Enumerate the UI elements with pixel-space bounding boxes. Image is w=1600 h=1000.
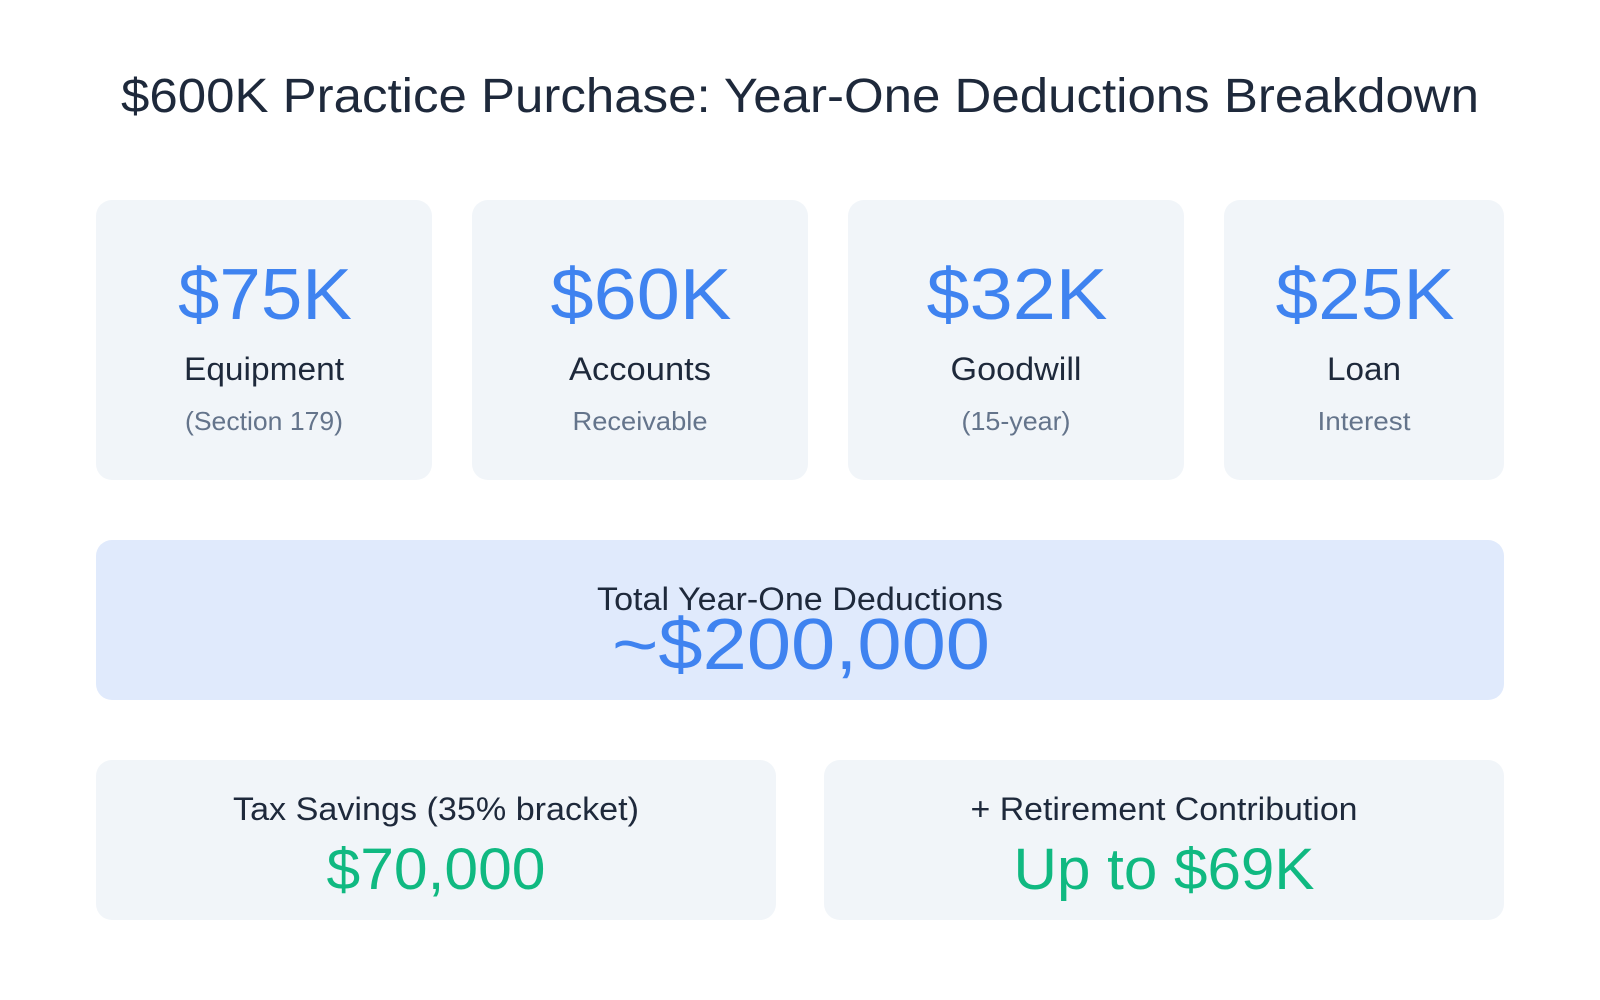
- label: total year-one deductions: Total Year-One Deductions: [597, 581, 1003, 617]
- value: equipment: $75K: [178, 255, 352, 335]
- value: goodwill: $32K: [926, 255, 1108, 335]
- note: 15-year: (15-year): [962, 406, 1070, 436]
- label: accounts: Accounts: [569, 351, 711, 387]
- label: tax savings: Tax Savings (35% bracket): [233, 791, 639, 827]
- title: $600K Practice Purchase: Year-One Deductions Breakdown: [121, 70, 1479, 123]
- panel: equipment: [96, 200, 432, 480]
- note: section 179: (Section 179): [185, 406, 343, 436]
- value: tax savings: $70,000: [326, 837, 546, 902]
- value: loan interest: $25K: [1276, 255, 1454, 335]
- value: accounts receivable: $60K: [550, 255, 732, 335]
- label: goodwill: Goodwill: [950, 351, 1082, 387]
- note: receivable: Receivable: [572, 406, 708, 436]
- label: equipment: Equipment: [184, 351, 344, 387]
- note: interest: Interest: [1318, 406, 1411, 436]
- panel: goodwill: [848, 200, 1184, 480]
- value: retirement: Up to $69K: [1014, 837, 1315, 902]
- value: total: ~$200,000: [612, 605, 990, 685]
- panel: tax savings: [96, 760, 776, 920]
- panel: total deductions: [96, 540, 1504, 700]
- label: loan: Loan: [1327, 351, 1401, 387]
- label: retirement contribution: + Retirement Contribution: [970, 791, 1358, 827]
- panel: accounts receivable: [472, 200, 808, 480]
- panel: loan interest: [1224, 200, 1504, 480]
- panel: retirement contribution: [824, 760, 1504, 920]
